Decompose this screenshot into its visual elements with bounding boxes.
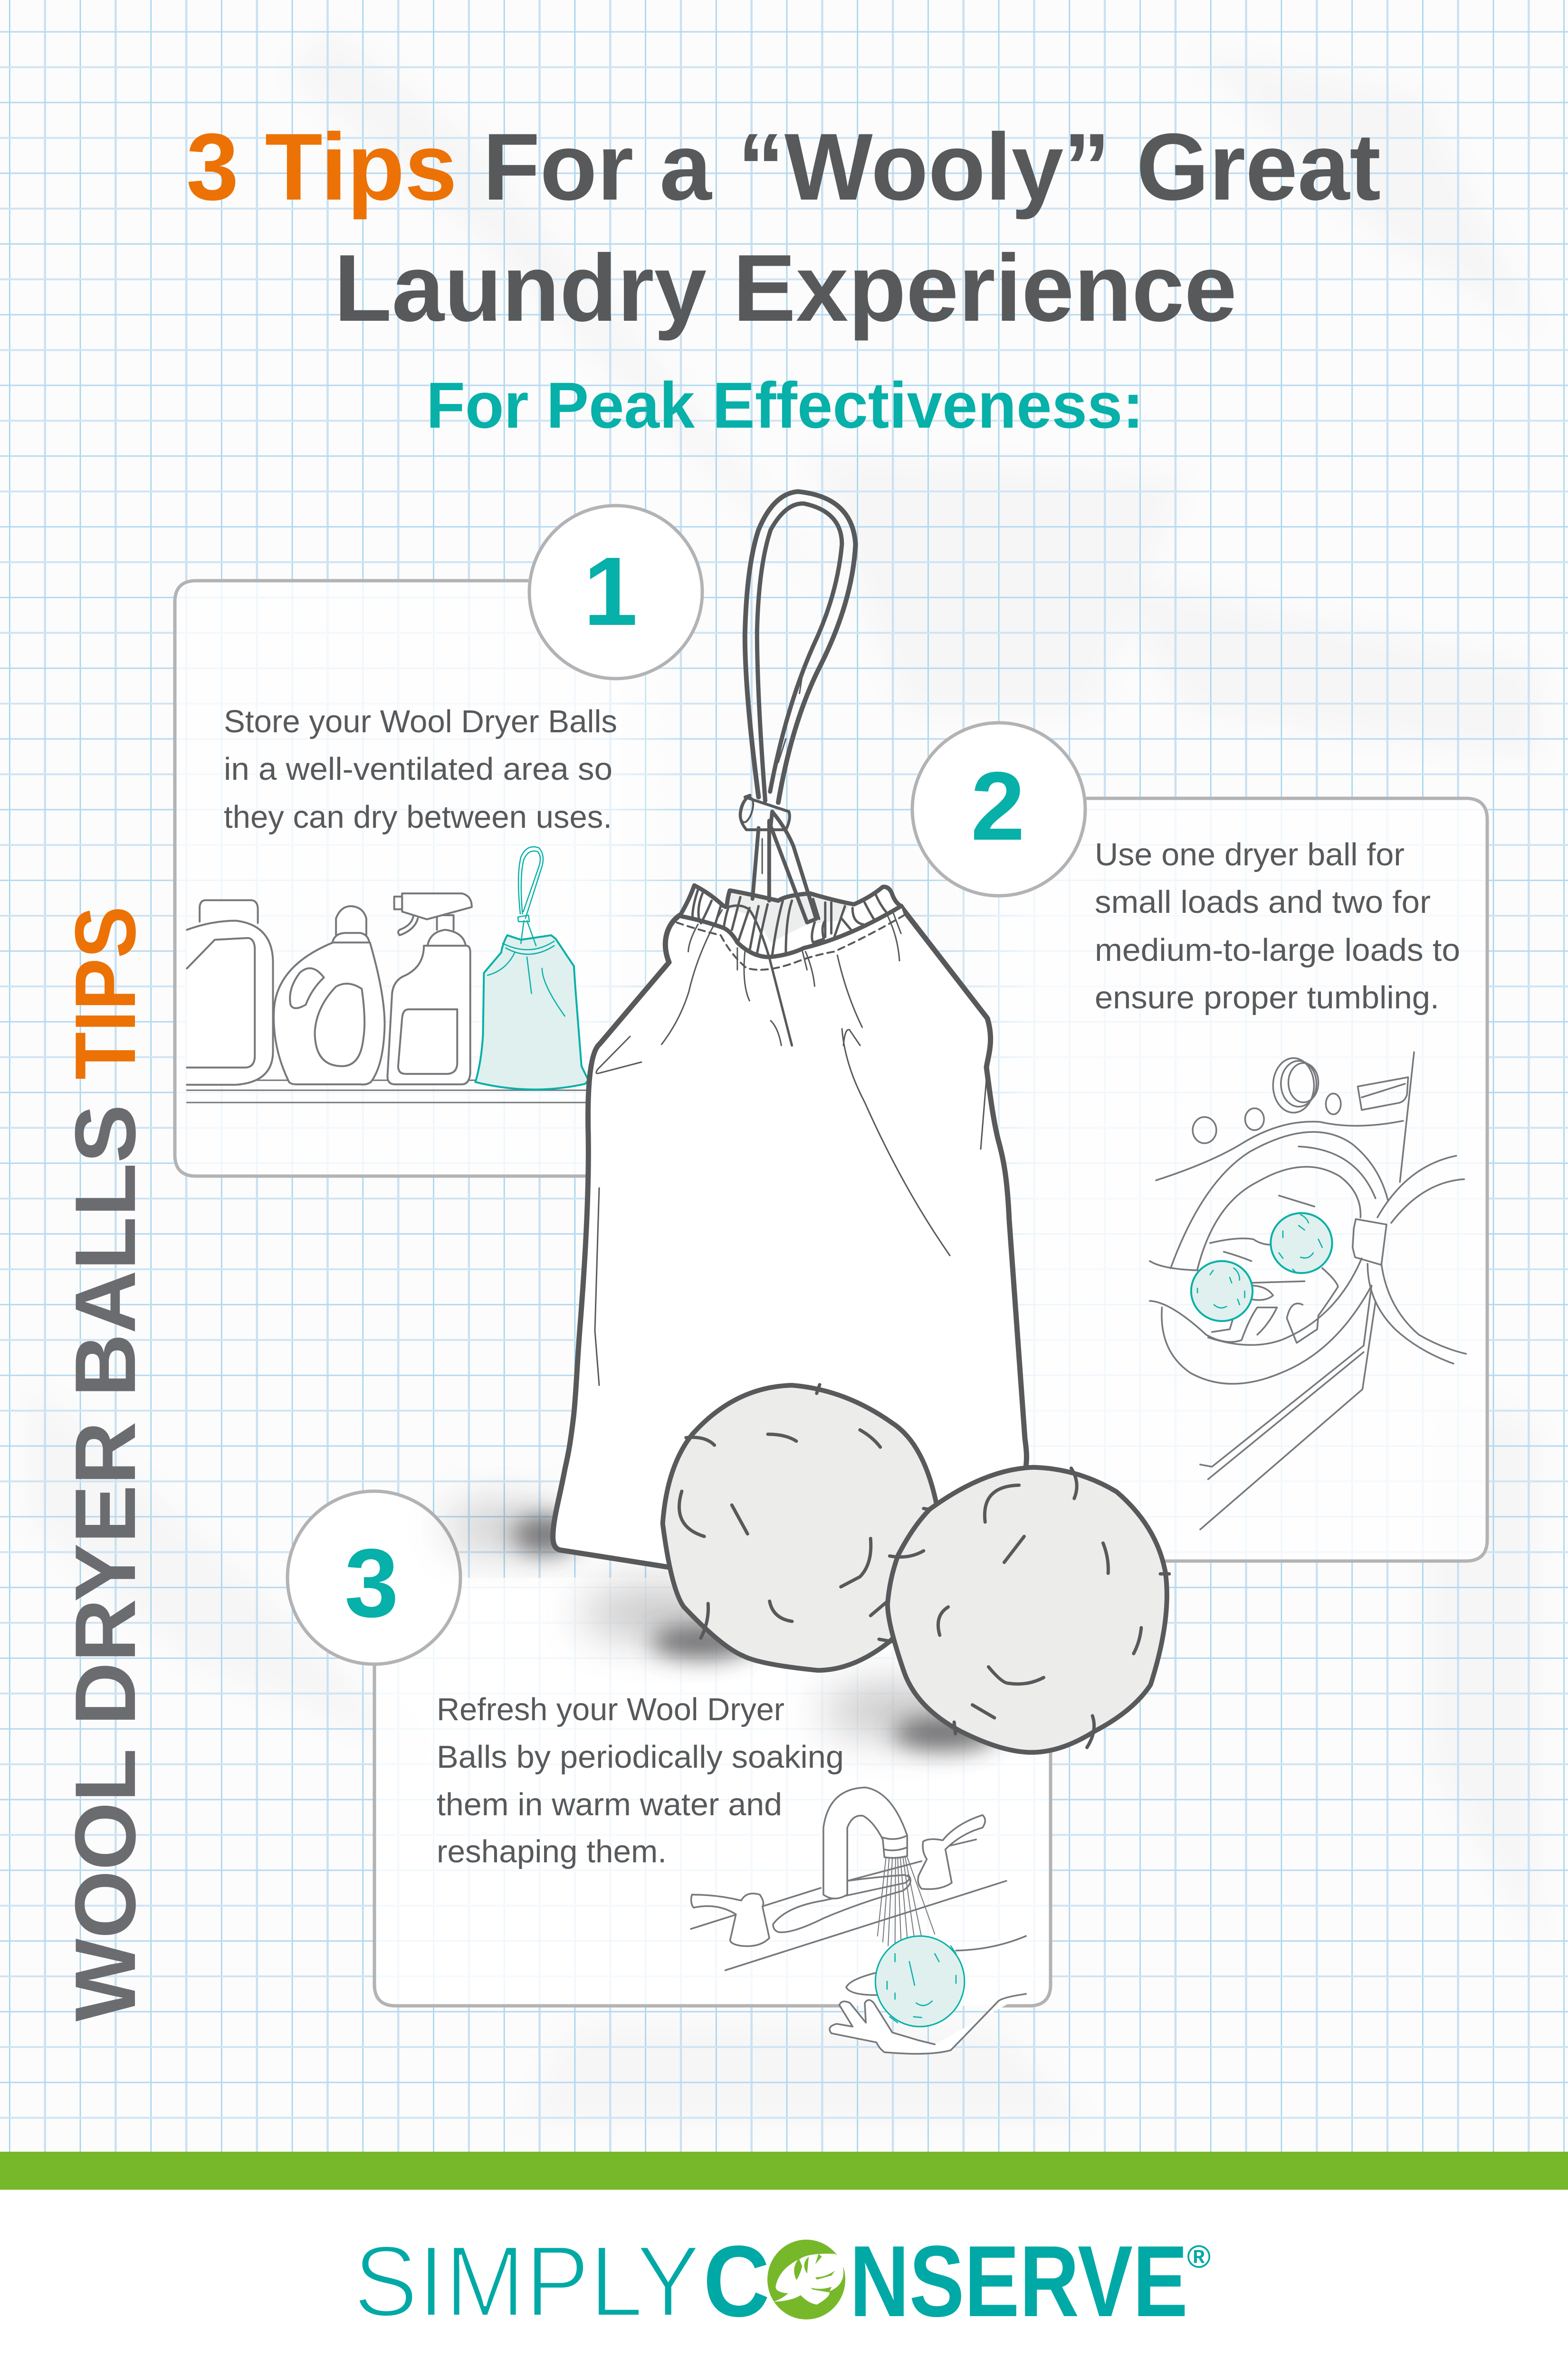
- ruffled top of the bag: [680, 885, 901, 916]
- Simply Conserve logo: ®: [1187, 2239, 1211, 2275]
- spray bottle: [388, 893, 472, 1084]
- tip 3 text: [437, 1692, 844, 1869]
- teal dryer balls: [1191, 1213, 1332, 1321]
- tip 3 text: them in warm water and: [437, 1787, 782, 1822]
- Simply Conserve logo: NSERVE: [850, 2225, 1188, 2338]
- tip 3 text: Refresh your Wool Dryer: [437, 1692, 784, 1727]
- panel 1: storage tip: [175, 581, 688, 1176]
- tip 1 text: Store your Wool Dryer Balls: [224, 704, 617, 739]
- tip 3 text: reshaping them.: [437, 1834, 667, 1869]
- tip 2 text: small loads and two for: [1095, 884, 1431, 920]
- vertical side heading: WOOL DRYER BALLS: [57, 1104, 153, 2022]
- wool dryer ball left: [663, 1385, 938, 1670]
- green footer bar: [0, 2152, 1568, 2190]
- title: [186, 114, 1381, 341]
- tip 2 text: [1095, 837, 1460, 1016]
- bag fold lines: [595, 1029, 987, 1385]
- number badge 2: [912, 723, 1085, 896]
- bottle one: [187, 900, 273, 1085]
- number badge 2: 2: [971, 752, 1025, 861]
- leaf O mark: [767, 2240, 845, 2319]
- illustration: faucet and hands: [691, 1788, 1026, 2054]
- panel 2: load size tip: [927, 798, 1487, 1561]
- tip 2 text: medium-to-large loads to: [1095, 932, 1460, 968]
- tip 3 text: Balls by periodically soaking: [437, 1739, 844, 1775]
- Simply Conserve logo: SIMPLY: [354, 2225, 700, 2338]
- tip 2 text: Use one dryer ball for: [1095, 837, 1405, 872]
- number badge 1: 1: [583, 537, 638, 646]
- vertical side heading: TIPS: [57, 906, 153, 1080]
- drawstring bag: [553, 491, 1026, 1567]
- title: 3 Tips: [186, 114, 457, 220]
- panel 3: refresh tip: [374, 1578, 1051, 2054]
- illustration: laundry shelf: [187, 847, 589, 1102]
- wool dryer ball right: [888, 1467, 1169, 1753]
- bottle two: [274, 906, 384, 1084]
- drawstring loop and toggle: [661, 491, 910, 1045]
- Simply Conserve logo: [354, 2225, 1211, 2338]
- title: Laundry Experience: [334, 235, 1237, 341]
- number badge 3: [287, 1491, 460, 1664]
- tip 1 text: [224, 704, 617, 835]
- bag body: [553, 906, 1026, 1567]
- Simply Conserve logo: C: [703, 2225, 770, 2338]
- tip 1 text: in a well-ventilated area so: [224, 751, 612, 787]
- subtitle: For Peak Effectiveness:: [426, 369, 1144, 442]
- small teal bag: [476, 847, 588, 1090]
- tip 1 text: they can dry between uses.: [224, 799, 612, 835]
- number badge 3: 3: [344, 1529, 399, 1638]
- soft shadows: [447, 1510, 998, 1751]
- teal ball in water: [875, 1936, 965, 2027]
- tip 2 text: ensure proper tumbling.: [1095, 980, 1439, 1016]
- hands: [830, 1994, 1026, 2054]
- title: For a “Wooly” Great: [483, 114, 1381, 220]
- illustration: washing machine: [1150, 1052, 1466, 1530]
- Simply Conserve logo: O: [771, 2229, 842, 2335]
- number badge 1: [529, 506, 702, 679]
